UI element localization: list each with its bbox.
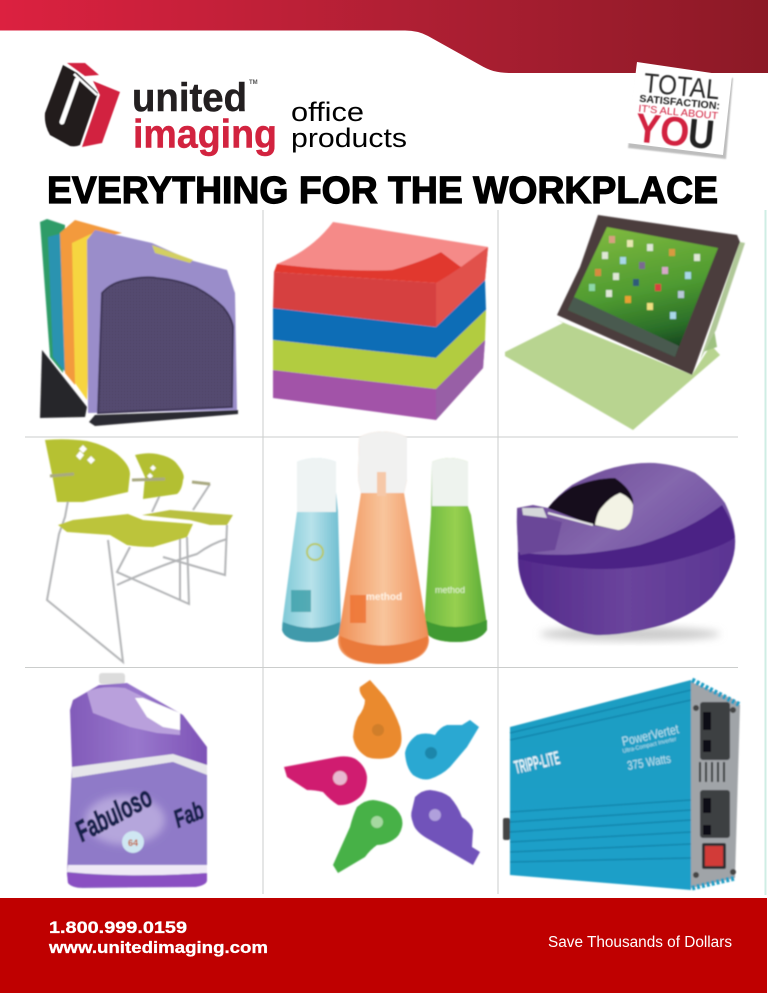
product: power inverter: 375 Watts [626,752,672,773]
badge text: it's all about: IT'S ALL ABOUT [638,103,719,122]
main heading: EVERYTHING FOR THE WORKPLACE [47,170,718,212]
footer phone number: 1.800.999.0159 [49,919,187,937]
footer band [0,898,767,993]
logo wordmark: imaging: imaging [133,112,277,156]
product: power inverter: TRIPP-LITE [512,748,562,779]
product: soap bottles [282,432,487,664]
product: fabuloso jug [67,673,208,888]
runner: blue [405,720,479,780]
header red swoosh band [0,0,768,73]
product: power inverter: Ultra-Compact Inverter [622,737,677,755]
logo text: products: products [291,123,407,153]
product: correction tape runners [284,680,480,873]
logo wordmark: united: united [132,76,247,120]
footer website: www.unitedimaging.com [48,939,268,957]
badge text: u: U [686,110,716,158]
product: file organizer [40,219,238,426]
product: soap bottles: method [435,585,465,595]
icon: logo shield mark [45,63,120,147]
product: stacking chairs [45,439,233,662]
product: fabuloso jug: Fab [170,796,208,834]
badge text: total: TOTAL [642,67,721,105]
runner: green [333,800,402,873]
product: tablet case [505,215,745,430]
product: power inverter [503,680,740,890]
trademark: TM [249,80,258,86]
product: power inverter: PowerVertet [620,721,680,749]
badge: total satisfaction [627,62,733,159]
badge text: satisfaction: SATISFACTION: [639,94,720,112]
logo: united imaging office products [45,63,407,156]
product: soap bottles: method [366,592,402,603]
product: fabuloso jug: Fabuloso [70,781,158,848]
product: fabuloso jug: 64 [128,838,138,848]
runner: purple [411,790,480,865]
badge text: yo: YO [633,105,692,156]
product: tape dispenser [517,463,735,641]
footer tagline: Save Thousands of Dollars [548,934,732,951]
logo text: office: office [291,97,364,127]
product: colored paper note cube [273,222,488,420]
runner: pink [284,756,367,805]
runner: orange [353,680,402,759]
